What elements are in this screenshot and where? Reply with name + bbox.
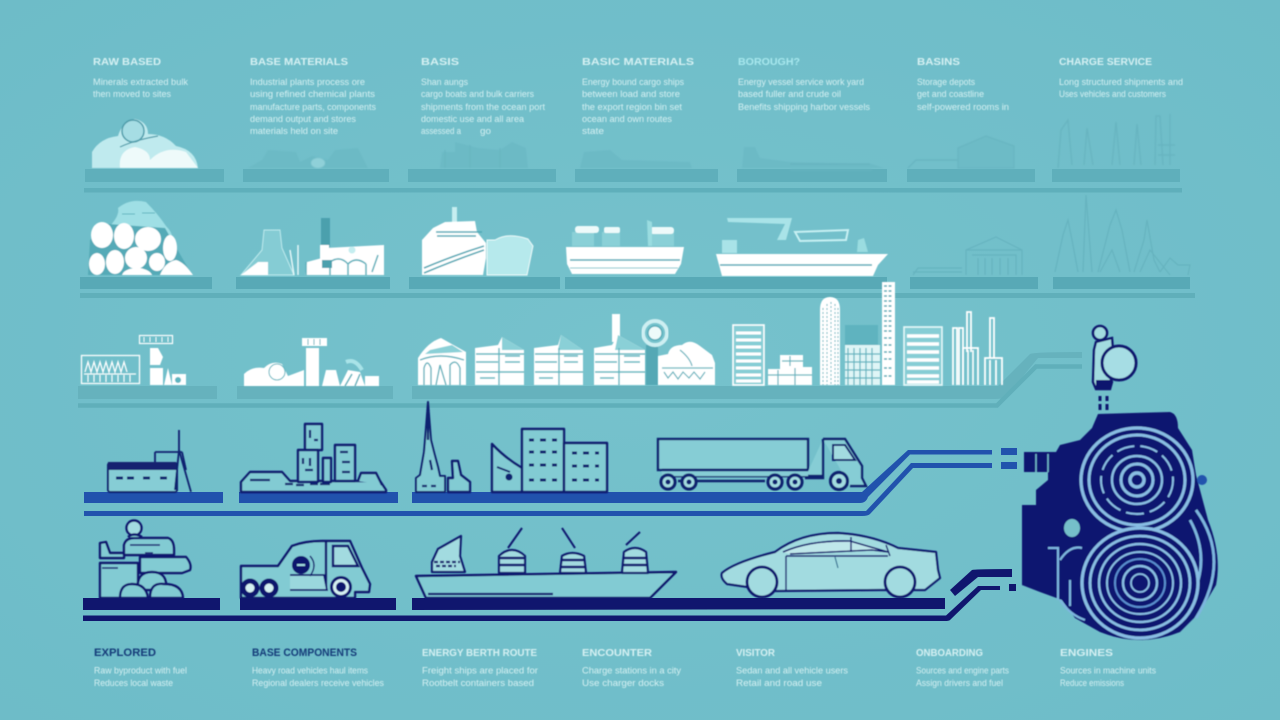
caption: column 6 (917, 56, 1009, 112)
caption: bottom column 2: Heavy road vehicles haul items (252, 666, 369, 676)
caption: column 4: state (582, 126, 604, 136)
icon: striped tower right (904, 327, 942, 385)
icon: city block (845, 325, 880, 385)
icon: block building 2 (534, 335, 583, 385)
shelf bars and pipe row 3 (78, 352, 1082, 406)
engine body (1022, 412, 1218, 640)
caption: bottom column 1: Raw byproduct with fuel (94, 666, 187, 676)
icon: cruise ship and hill (422, 207, 533, 275)
caption: column 4: between load and store (582, 89, 680, 99)
caption: bottom column 6 (916, 647, 1010, 688)
caption: column 5 (738, 56, 871, 112)
caption: column 3: assessed a (421, 126, 461, 136)
icon: chimneys (953, 312, 1002, 385)
caption: column 3: Shan aungs (421, 77, 469, 87)
icon: faint towers (1058, 114, 1175, 168)
shelf bars row 1 (84, 169, 1182, 192)
icon: faint spires (1055, 195, 1190, 275)
caption: column 1 (93, 56, 189, 99)
shelf bars row 2 (80, 277, 1195, 298)
caption: column 5: Energy vessel service work yard (738, 77, 864, 87)
caption: bottom column 6: ONBOARDING (916, 647, 983, 659)
caption: column 4: Energy bound cargo ships (582, 77, 685, 87)
icon: faint depot (908, 136, 1014, 168)
icon: rock pile, pale (92, 119, 198, 168)
icon: narrow tower (882, 282, 895, 385)
caption: column 2: manufacture parts, components (250, 102, 377, 112)
icon: faint tanker (742, 147, 884, 170)
icon: factory cluster (241, 218, 384, 275)
caption: bottom column 3: Freight ships are placed for (422, 666, 538, 676)
caption: column 2: Industrial plants process ore (250, 77, 365, 87)
caption: column 3: shipments from the ocean port (421, 102, 546, 112)
icon: large rock pile (88, 201, 193, 275)
icon: tall dotted tower (820, 297, 840, 385)
caption: bottom column 3: Rootbelt containers based (422, 678, 534, 688)
caption: bottom column 4: Charge stations in a city (582, 666, 682, 676)
row 1: faint shelf (84, 114, 1182, 192)
caption: bottom column 7: Reduce emissions (1060, 678, 1125, 688)
icon: lower rotor (1082, 528, 1198, 638)
caption: column 5: BOROUGH? (738, 56, 800, 68)
row 2: white shelf (80, 195, 1195, 298)
caption: bottom column 3: ENERGY BERTH ROUTE (422, 647, 537, 659)
caption: column 2: BASE MATERIALS (250, 56, 348, 68)
caption: column 7: CHARGE SERVICE (1059, 56, 1152, 68)
row 3: skyline shelf (78, 282, 1082, 406)
icon: tanker with cranes (716, 218, 888, 276)
caption: column 7: Long structured shipments and (1059, 77, 1183, 87)
caption: column 4: the export region bin set (582, 102, 683, 112)
caption: column 4: ocean and own routes (582, 114, 673, 124)
caption: column 5: Benefits shipping harbor vessels (738, 102, 871, 112)
caption: column 1: Minerals extracted bulk (93, 77, 189, 87)
caption: bottom column 2 (252, 647, 385, 688)
row 5: navy shelf (83, 520, 1016, 621)
icon: rocks and storage (100, 520, 190, 598)
caption: column 2: demand output and stores (250, 114, 357, 124)
caption: bottom column 1: Reduces local waste (94, 678, 173, 688)
engine left stub highlight (1036, 454, 1214, 620)
caption: column 6: BASINS (917, 56, 960, 68)
caption: column 6: Storage depots (917, 77, 976, 87)
caption: bottom column 5: Sedan and all vehicle users (736, 666, 849, 676)
caption: column 3: BASIS (421, 56, 459, 68)
caption: column 7: Uses vehicles and customers (1059, 89, 1167, 99)
icon: notice board and blocks (82, 336, 186, 385)
icon: factory with crane (108, 430, 191, 492)
icon: delivery truck (241, 541, 370, 598)
caption: column 5: based fuller and crude oil (738, 89, 841, 99)
icon: harbor buildings (241, 424, 386, 492)
icon: stone pile (658, 342, 715, 385)
caption: bottom column 6: Assign drivers and fuel (916, 678, 1003, 688)
caption: bottom column 3 (422, 647, 538, 688)
row 4: blue shelf (84, 402, 1017, 516)
icon: block building 3 (594, 314, 645, 385)
caption: bottom column 7 (1060, 647, 1157, 688)
caption: bottom column 2: BASE COMPONENTS (252, 647, 357, 659)
icon: block building 1 (475, 337, 524, 385)
icon: piles with tower (244, 338, 379, 386)
icon: striped tower (733, 325, 764, 385)
icon: faint warehouse (913, 237, 1022, 275)
icon: semi truck (658, 439, 866, 490)
icon: container ship (566, 220, 684, 274)
caption: bottom column 4: Use charger docks (582, 678, 665, 688)
caption: column 7 (1059, 56, 1183, 99)
caption: bottom column 5: Retail and road use (736, 678, 822, 688)
caption: column 1: RAW BASED (93, 56, 161, 68)
icon: faint ship buildings (440, 142, 528, 168)
caption: bottom column 1: EXPLORED (94, 647, 156, 659)
top text captions (93, 56, 1183, 136)
icon: upper rotor (1081, 428, 1193, 532)
icon: brick stack (768, 355, 812, 385)
caption: bottom column 1 (94, 647, 187, 688)
caption: bottom column 7: ENGINES (1060, 647, 1113, 659)
caption: column 1: then moved to sites (93, 89, 172, 99)
caption: column 6: self-powered rooms in (917, 102, 1009, 112)
icon: gear tree (643, 321, 667, 385)
caption: bottom column 5: VISITOR (736, 647, 775, 659)
caption: bottom column 7: Sources in machine units (1060, 666, 1157, 676)
caption: column 3: cargo boats and bulk carriers (421, 89, 535, 99)
caption: bottom column 6: Sources and engine parts (916, 666, 1010, 676)
caption: bottom column 2: Regional dealers receive vehicles (252, 678, 385, 688)
caption: column 3: domestic use and all area (421, 114, 524, 124)
caption: column 6: get and coastline (917, 89, 984, 99)
caption: column 2: materials held on site (250, 126, 338, 136)
icon: domed hall (418, 338, 466, 385)
caption: bottom column 4: ENCOUNTER (582, 647, 652, 659)
icon: port crane tower (416, 402, 470, 492)
caption: column 3: go (480, 126, 491, 136)
shelf bars and pipe row 5 (83, 569, 1016, 621)
caption: bottom column 5 (736, 647, 849, 688)
caption: column 3 (421, 56, 546, 136)
icon: office buildings (492, 429, 607, 492)
shelf bars and pipe row 4 (84, 448, 1017, 516)
caption: column 2: using refined chemical plants (250, 89, 376, 99)
icon: valve on top (1093, 326, 1136, 410)
caption: column 4 (582, 56, 694, 136)
icon: sedan car (722, 533, 940, 597)
icon: faint plant (248, 148, 368, 168)
icon: faint vessel (580, 150, 692, 168)
caption: bottom column 4 (582, 647, 682, 688)
engine machine (1022, 326, 1218, 640)
icon: cargo ship (416, 528, 676, 598)
caption: column 2 (250, 56, 377, 136)
caption: column 4: BASIC MATERIALS (582, 56, 694, 68)
bottom text captions (94, 647, 1157, 688)
